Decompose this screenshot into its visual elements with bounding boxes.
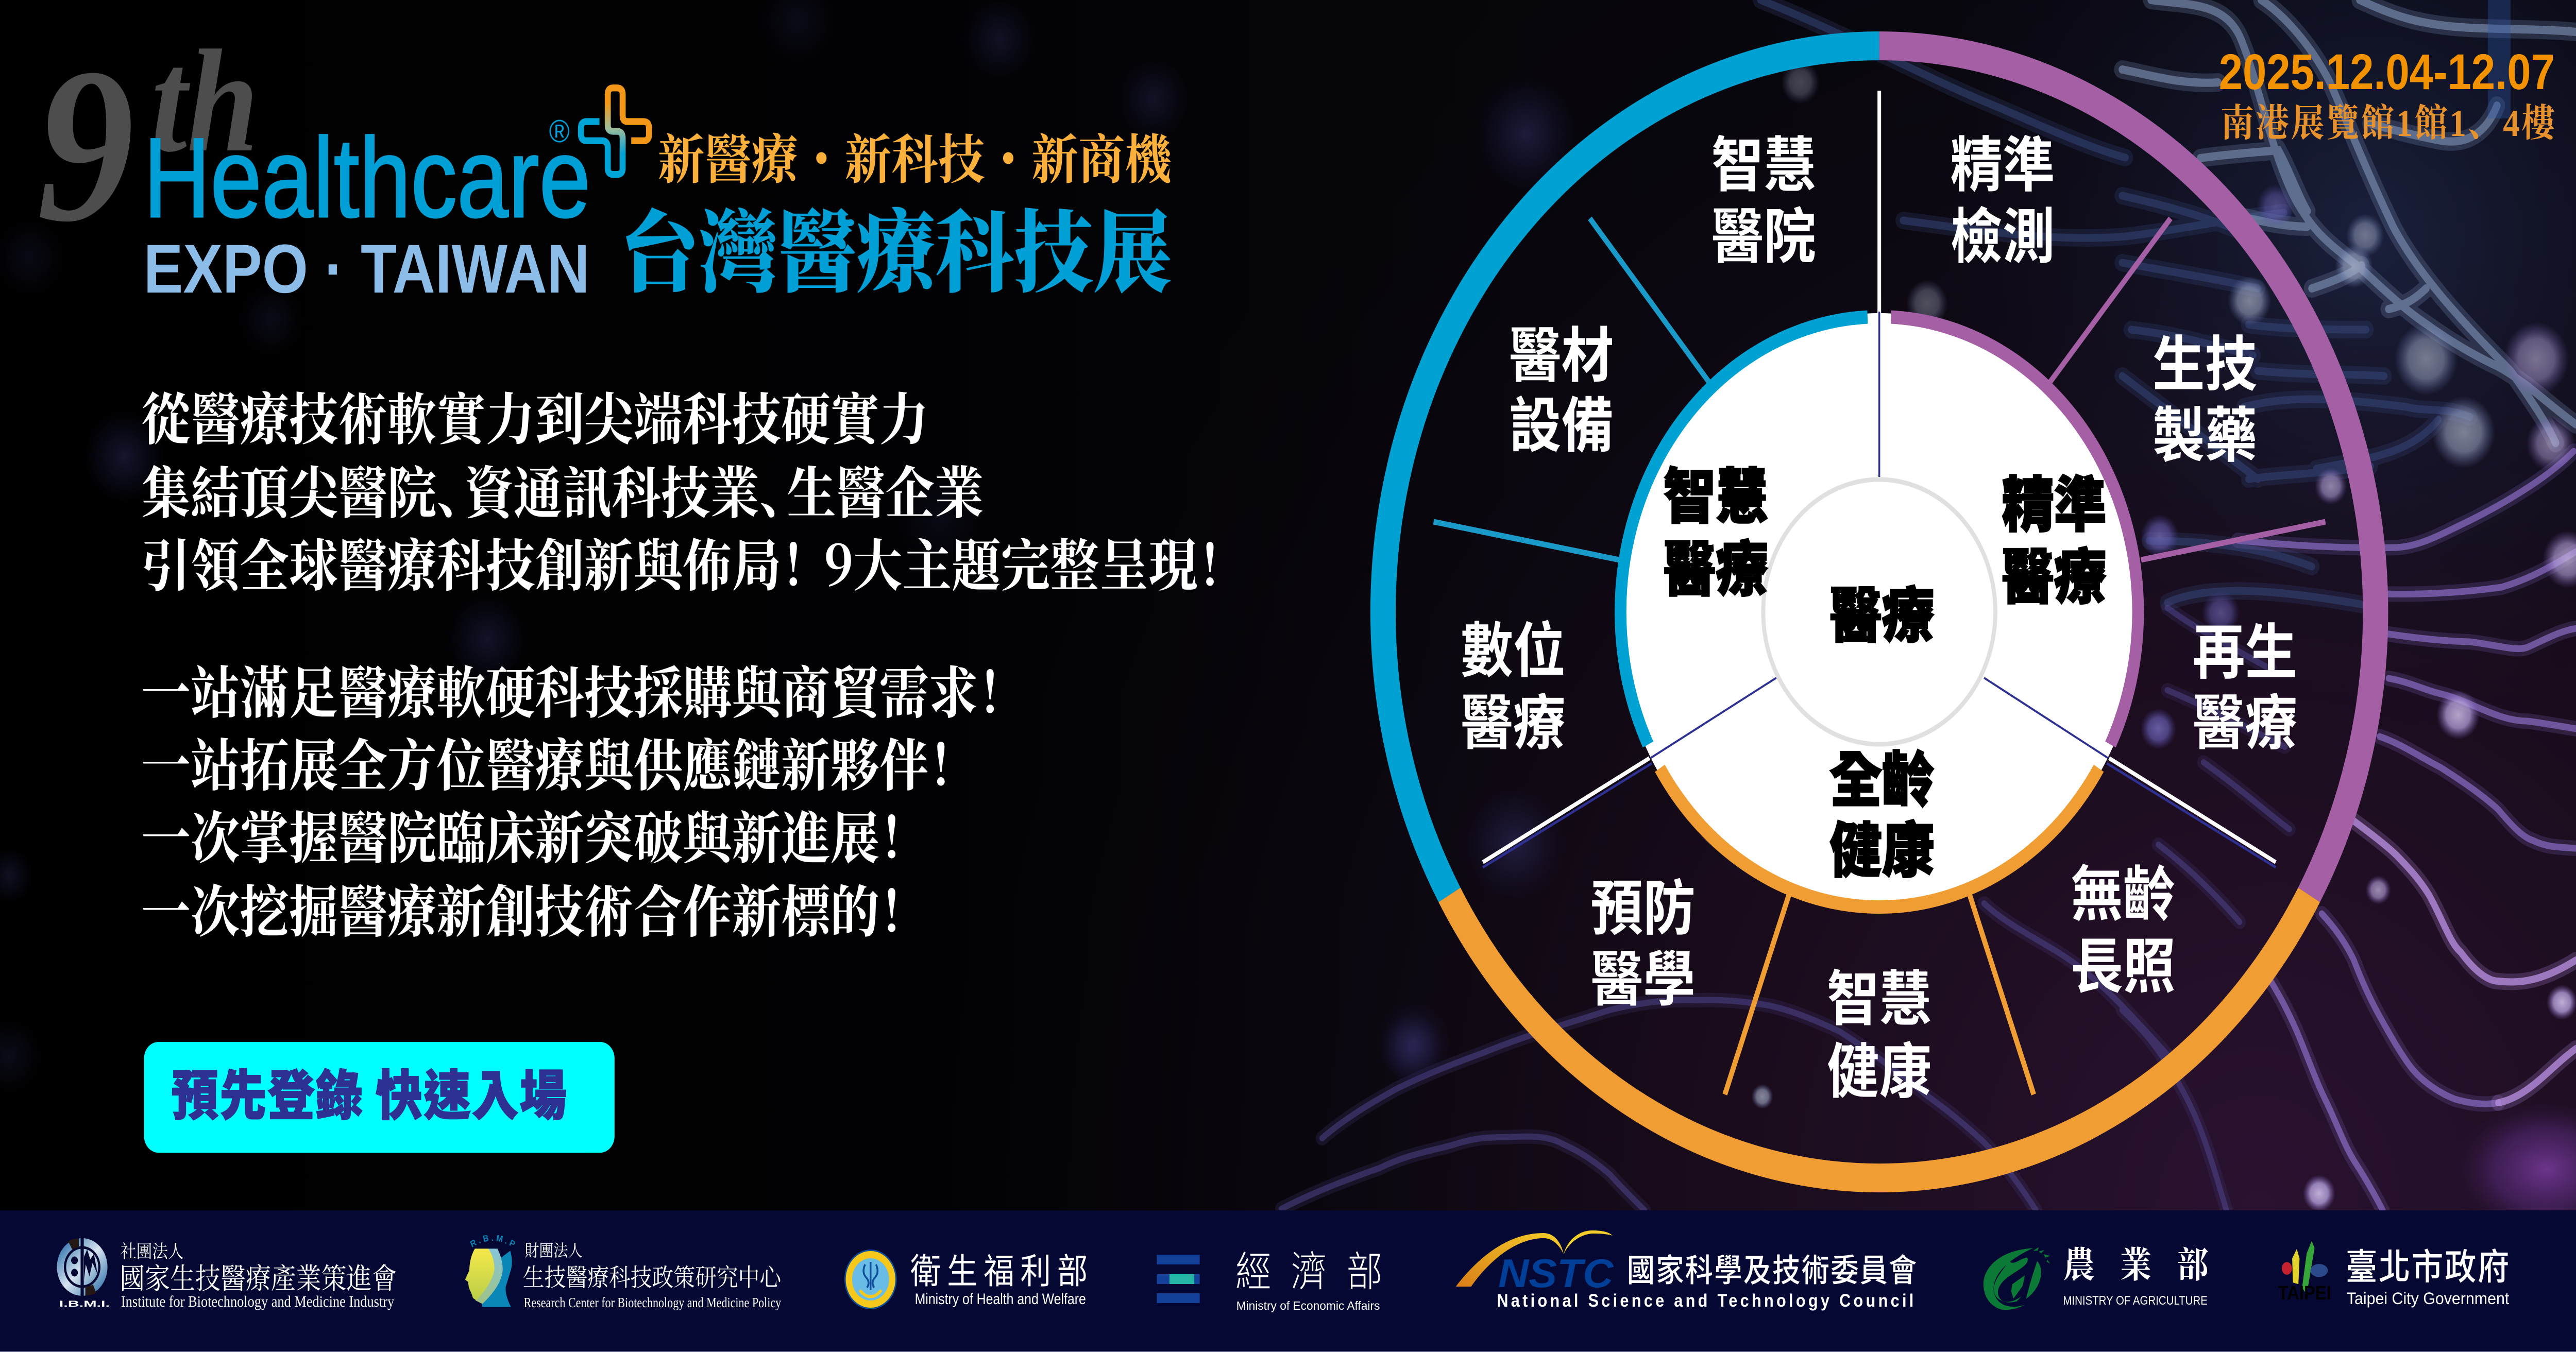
text block: introduction: 引領全球醫療科技創新與佈局！9大主題完整呈現！ — [141, 522, 1247, 602]
inner label: precision medicine: 精準 — [2002, 457, 2107, 543]
sponsor: NSTC: National Science and Technology Council — [1497, 1290, 1913, 1310]
icon: IBMI globe — [57, 1236, 108, 1298]
sponsor: Ministry of Agriculture — [1984, 1236, 2209, 1310]
icon: MOHW seal — [844, 1250, 897, 1309]
logo: Healthcare EXPO TAIWAN wordmark: EXPO · TAIWAN — [144, 230, 590, 307]
logo: 9th anniversary mark: th — [151, 20, 259, 182]
label: biotech pharma: 生技 — [2153, 316, 2257, 403]
text block: introduction: 從醫療技術軟實力到尖端科技硬實力 — [141, 375, 929, 456]
sponsor: IBMI: 國家生技醫療產業策進會 — [120, 1256, 397, 1297]
centre circle — [1763, 480, 1995, 744]
label: precision testing: 檢測 — [1950, 189, 2055, 275]
icon: NSTC arcs — [1456, 1230, 1613, 1287]
sponsor: Ministry of Health and Welfare: 衛生福利部 — [910, 1243, 1088, 1294]
icon: RBMP head — [465, 1235, 515, 1307]
label: biotech pharma: 製藥 — [2153, 387, 2257, 474]
logo: Healthcare EXPO TAIWAN wordmark: ® — [549, 114, 570, 149]
inner ring: purple — [1891, 317, 2138, 745]
sponsor: Ministry of Agriculture: 農業部 — [2063, 1236, 2209, 1288]
label: medical equipment: 設備 — [1509, 378, 1614, 464]
outer ring: purple segment — [1879, 46, 2376, 895]
label: digital medicine: 數位 — [1461, 603, 1566, 689]
button: pre-registration: 預先登錄 快速入場 — [172, 1053, 567, 1131]
icon: Taipei mark: TAIPEI — [2278, 1282, 2331, 1304]
label: ageless long-term care: 長照 — [2071, 918, 2176, 1005]
sponsor: Taipei City Government — [2278, 1238, 2510, 1308]
label: medical equipment: 醫材 — [1509, 307, 1614, 394]
icon: MOA leaf — [1984, 1247, 2050, 1310]
date and venue: 2025.12.04-12.07 — [2219, 44, 2555, 100]
label: ageless long-term care: 無齡 — [2071, 846, 2176, 933]
date and venue: 南港展覽館1館1、4樓 — [2221, 102, 2556, 145]
footer band — [0, 1210, 2576, 1352]
outer ring: orange segment — [1449, 895, 2309, 1178]
sponsor: Ministry of Economic Affairs: 經濟部 — [1235, 1238, 1383, 1298]
sponsor: Ministry of Health and Welfare: Ministry of Health and Welfare — [915, 1290, 1086, 1307]
text block: four benefits: 一站拓展全方位醫療與供應鏈新夥伴！ — [141, 722, 978, 802]
sponsor: RBMP: 生技醫療科技政策研究中心 — [523, 1258, 782, 1293]
inner ring: orange — [1660, 768, 2099, 907]
sponsor: RBMP: Research Center for Biotechnology and Medicine Policy — [524, 1295, 781, 1310]
logo: 9th anniversary mark — [37, 20, 259, 268]
sponsor: IBMI — [57, 1236, 397, 1310]
sponsor: NSTC: NSTC — [1498, 1251, 1614, 1296]
sponsor: IBMI: I.B.M.I. — [59, 1299, 110, 1309]
text block: introduction: 集結頂尖醫院、資通訊科技業、生醫企業 — [141, 449, 984, 529]
sponsor: RBMP — [465, 1235, 782, 1310]
label: regenerative medicine: 再生 — [2193, 604, 2297, 691]
label: digital medicine: 醫療 — [1461, 675, 1566, 761]
inner white disc — [1617, 313, 2141, 911]
inner navy dividers — [1650, 312, 2108, 758]
icon: MOEA stripes — [1157, 1255, 1200, 1303]
icon: RBMP head: R.B.M.P — [470, 1235, 515, 1247]
sponsor: Ministry of Agriculture: MINISTRY OF AGRICULTURE — [2063, 1294, 2208, 1307]
inner label: all-age health: 健康 — [1829, 802, 1935, 889]
sponsor: IBMI: 社團法人 — [121, 1238, 184, 1263]
sponsor: NSTC — [1456, 1230, 1917, 1310]
label: precision testing: 精準 — [1950, 117, 2055, 203]
label: regenerative medicine: 醫療 — [2193, 675, 2297, 761]
chart: nine-theme radial wheel — [1383, 46, 2376, 1178]
label: preventive medicine: 醫學 — [1591, 931, 1696, 1018]
icon: plus sign outline — [581, 88, 649, 175]
sponsor: Taipei City Government: 臺北市政府 — [2346, 1238, 2509, 1290]
outer ring: blue segment — [1383, 46, 1879, 895]
text block: four benefits: 一次掌握醫院臨床新突破與新進展！ — [141, 794, 929, 875]
sponsor: Taipei City Government: Taipei City Government — [2347, 1290, 2510, 1308]
date and venue — [2219, 44, 2556, 145]
sponsor: RBMP: 財團法人 — [524, 1237, 583, 1261]
centre label: 醫療 — [1829, 568, 1935, 654]
title: Chinese exhibition name: 台灣醫療科技展 — [620, 181, 1172, 310]
logo: Healthcare EXPO TAIWAN wordmark — [144, 114, 590, 307]
label: smart hospital: 醫院 — [1711, 189, 1816, 275]
label: smart hospital: 智慧 — [1711, 117, 1816, 203]
sponsor: NSTC: 國家科學及技術委員會 — [1627, 1244, 1917, 1291]
inner label: smart medicine: 醫療 — [1664, 521, 1768, 608]
spoke lines — [1434, 91, 2326, 1094]
label: smart health: 健康 — [1827, 1023, 1931, 1110]
sponsor: Ministry of Health and Welfare — [844, 1243, 1088, 1309]
sponsor: Ministry of Economic Affairs — [1157, 1238, 1383, 1312]
inner label: precision medicine: 醫療 — [2002, 529, 2107, 615]
label: preventive medicine: 預防 — [1591, 860, 1696, 947]
slogan: 新醫療・新科技・新商機 — [658, 117, 1174, 194]
text block: four benefits: 一站滿足醫療軟硬科技採購與商貿需求！ — [141, 649, 1027, 729]
text block: four benefits: 一次挖掘醫療新創技術合作新標的！ — [141, 868, 929, 948]
label: smart health: 智慧 — [1827, 951, 1931, 1037]
sponsor: Ministry of Economic Affairs: Ministry of Economic Affairs — [1236, 1299, 1380, 1312]
logo: Healthcare EXPO TAIWAN wordmark: Healthcare — [144, 114, 590, 241]
sponsor: IBMI: Institute for Biotechnology and Medicine Industry — [121, 1293, 395, 1310]
icon: Taipei mark — [2278, 1241, 2331, 1304]
inner ring: blue — [1620, 317, 1868, 745]
logo: 9th anniversary mark: 9 — [37, 23, 134, 268]
inner label: all-age health: 全齡 — [1829, 732, 1935, 818]
inner label: smart medicine: 智慧 — [1664, 449, 1768, 535]
button: pre-registration — [144, 1042, 615, 1153]
